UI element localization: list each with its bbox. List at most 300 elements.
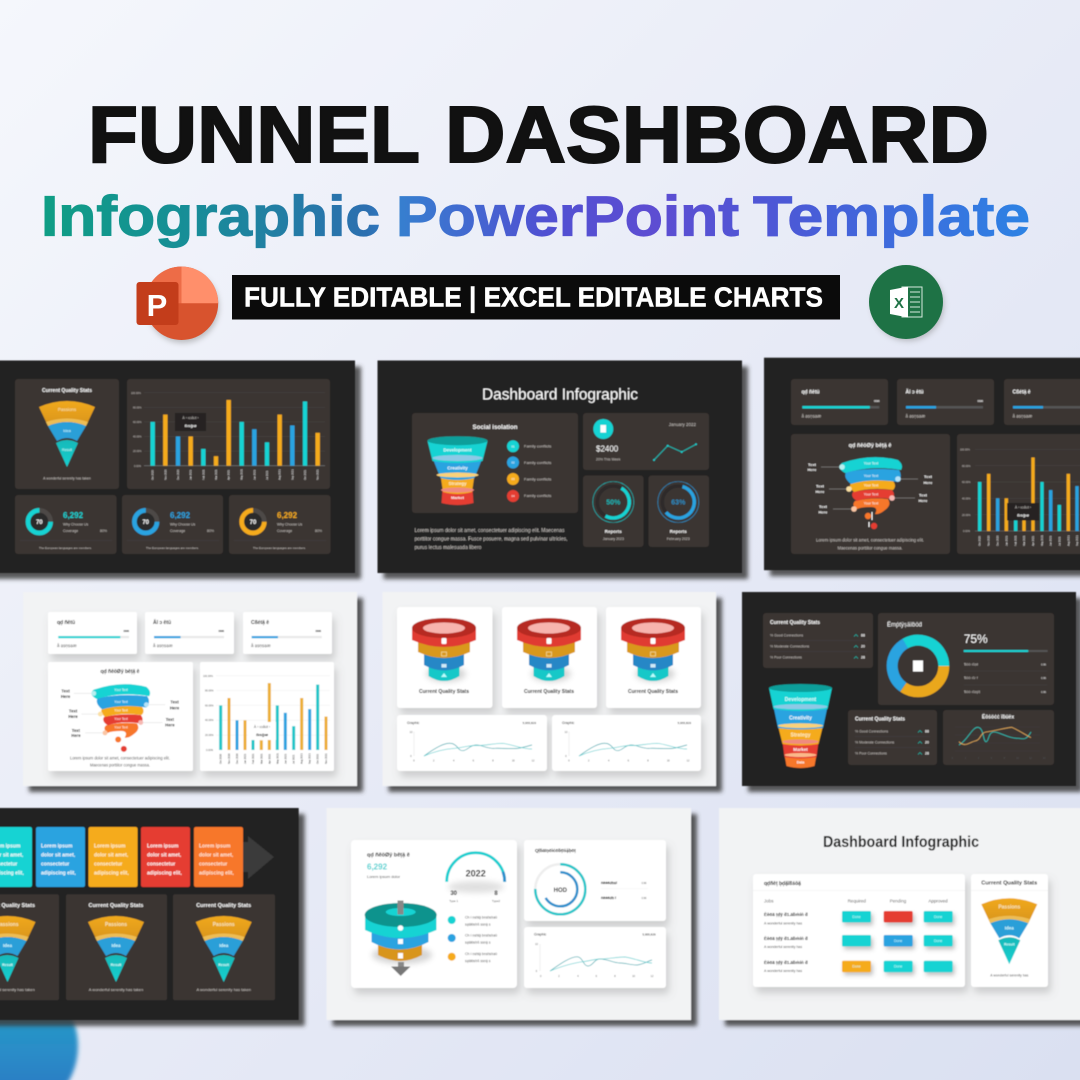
- tile: gold: consectetur: [94, 862, 122, 868]
- card: progress one: [48, 612, 137, 654]
- card: donut stat cyan: [15, 495, 116, 554]
- bar chart: Feb 2021: [252, 753, 255, 764]
- card: funnel overview: ṣḁṭạ̈ḅṣḥß ṣṣṇḁ̈ ṣ: [465, 922, 491, 926]
- tile: gold: Lorem ipsum: [94, 844, 126, 850]
- card: donut stat blue: The European languages are members.: [146, 546, 199, 550]
- card: stacked funnel three: Current Quality Stats: [628, 689, 678, 695]
- card: donut stat gold: Why Choose Us: [277, 522, 303, 526]
- card: HOD rings: Qḷḃäïņöìċöḃṭïṡḁ̈ḅöṭ: [535, 848, 576, 853]
- card: progress two: Äî ɔ êtü: [153, 619, 171, 626]
- card: funnel two: [66, 894, 167, 1000]
- card: donut stat blue: 70: [142, 520, 150, 526]
- card: progress two: [145, 612, 234, 654]
- bar chart: Jul 2021: [293, 754, 296, 764]
- line chart: graphic one: 8: [492, 760, 494, 762]
- card: donut overview: 0.96: [1041, 691, 1047, 694]
- card: quality stats lower: % Good Connections: [855, 730, 888, 734]
- card: quality stats table: 20: [861, 644, 865, 648]
- bar chart: ßısğıø: [256, 732, 268, 737]
- tile: blue: adipiscing elit,: [41, 870, 76, 876]
- card: funnel overview: 8: [494, 891, 498, 897]
- funnel: five stages: Market: [793, 747, 808, 752]
- bar chart: 40.00%: [205, 719, 214, 722]
- bar chart: monthly percent: Jul 2021: [266, 470, 269, 480]
- card: donut overview: Ɓöö ıßɾ ř: [964, 676, 979, 680]
- card: quality stats table: % Moderate Connections: [770, 644, 810, 648]
- card: funnel two: Result: [111, 963, 122, 967]
- line chart: graphic: 4: [577, 975, 579, 978]
- card: donut stat gold: The European languages are members.: [253, 546, 306, 550]
- card: layered funnel: Text: [170, 700, 179, 705]
- panel: slide 5 light stacked funnels: [382, 592, 716, 786]
- tile: red: [141, 827, 190, 887]
- bar chart: 100.00%: [203, 675, 214, 678]
- card: funnel: Passions: [998, 904, 1020, 910]
- bar chart: monthly percent: Nov 2021: [317, 469, 320, 480]
- tile: gold: adipiscing elit,: [94, 870, 129, 876]
- title: DASHBOARD: [445, 90, 989, 179]
- bar chart: Sep 2021: [1076, 535, 1079, 546]
- bar chart: May 2021: [1041, 534, 1044, 546]
- card: funnel overview: qḍ ñêöØÿ bêṭạ̈ ê: [367, 852, 410, 858]
- card: current quality stats funnel: Idea: [63, 428, 72, 433]
- line chart: graphic two: 0: [565, 755, 567, 758]
- card: funnel three: Passions: [213, 922, 235, 928]
- card: quality stats table: Current Quality Stats: [770, 620, 820, 626]
- line chart: graphic one: 12: [532, 760, 535, 762]
- line chart: graphic two: 4: [608, 760, 610, 762]
- card: donut overview: Ëmṗtÿṣäìḃöḋ: [887, 622, 922, 628]
- card: progress one: qḍ ñêtü: [802, 390, 820, 396]
- card: stacked funnel two: Current Quality Stats: [524, 689, 574, 695]
- card: jobs table: Done: [852, 965, 861, 969]
- tile: orange: Lorem ipsum: [199, 844, 231, 850]
- card: social isolation funnel: Family conflicts: [524, 460, 551, 465]
- card: progress one: 0096: [874, 400, 880, 403]
- card: report ring 63%: [648, 476, 709, 547]
- funnel: five stages: Data: [797, 760, 804, 764]
- card: funnel overview: 30: [450, 891, 458, 897]
- card: HOD rings: ṅäẇäḍḥṣï: [601, 881, 618, 885]
- card: donut stat blue: Coverage: [170, 529, 185, 533]
- line chart: graphic two: 12: [687, 760, 690, 762]
- card: funnel three: Result: [218, 963, 230, 967]
- card: progress two: 0096: [977, 400, 984, 403]
- panel: slide 3 dark funnel and chart: [764, 358, 1080, 570]
- bar chart: monthly percent: May 2021: [241, 468, 244, 480]
- line chart: graphic one: 10: [512, 760, 515, 762]
- bar chart: 20.00%: [205, 734, 214, 737]
- bar chart: monthly percent: Mar 2021: [215, 469, 218, 480]
- bar chart: monthly percent: Dec 2020: [177, 469, 180, 480]
- card: donut stat cyan: 80%: [100, 529, 107, 533]
- card: layered funnel: Your Text: [114, 700, 128, 704]
- card: funnel one: Idea: [3, 943, 12, 948]
- icon: PowerPoint: P: [147, 288, 167, 323]
- card: layered funnel: Here: [165, 722, 175, 727]
- line chart: graphic two: 10: [667, 760, 670, 762]
- card: layered funnel: qḍ ñêöØÿ bêṭạ̈ ê: [101, 669, 140, 675]
- bar chart: monthly percent: 80.00%: [133, 406, 142, 410]
- card: funnel three: Idea: [219, 943, 229, 948]
- card: donut stat cyan: Coverage: [63, 529, 78, 533]
- line chart: graphic: 10: [632, 975, 636, 978]
- line chart: graphic: 5,955,829: [642, 932, 656, 936]
- bar chart: monthly percent: Feb 2021: [202, 469, 205, 480]
- line chart: trends: [943, 710, 1054, 765]
- bar chart: monthly percent: À › ıcıåút ›: [182, 416, 199, 420]
- card: sales line: 20% This Week: [596, 458, 621, 462]
- bar chart: Apr 2021: [1032, 535, 1035, 546]
- card: progress two: å ạṣṇṣạæ: [906, 412, 925, 418]
- bar chart: Dec 2020: [997, 535, 1000, 546]
- card: quality stats lower: 88: [925, 730, 929, 734]
- card: donut stat cyan: Why Choose Us: [63, 522, 89, 526]
- card: progress one: 0096: [123, 630, 130, 633]
- card: funnel overview: Type 1: [449, 899, 459, 903]
- line chart: graphic one: Graphic: [407, 721, 420, 725]
- bar chart: monthly percent: Jun 2021: [253, 469, 256, 480]
- line chart: graphic: Graphic: [534, 932, 547, 936]
- bar chart: monthly percent: 20.00%: [133, 450, 142, 453]
- bar chart: Oct 2020: [979, 535, 982, 546]
- card: donut stat blue: 80%: [207, 529, 214, 533]
- bar chart: 80.00%: [205, 690, 214, 692]
- bar chart: Jan 2021: [244, 753, 247, 764]
- card: sales line: $2400: [596, 444, 619, 454]
- card: current quality stats funnel: A wonderful serenity has taken: [43, 476, 91, 480]
- line chart: graphic: 0: [536, 970, 538, 973]
- line chart: graphic one: 4: [453, 760, 455, 762]
- tile: blue: [36, 827, 85, 887]
- card: layered funnel: Your Text: [114, 709, 128, 713]
- bar chart: monthly percent: Oct 2020: [152, 469, 155, 480]
- card: stacked funnel one: [397, 607, 492, 708]
- bar chart: Jun 2021: [284, 753, 287, 764]
- line chart: trends: 4: [978, 757, 980, 760]
- bar chart: 60.00%: [205, 704, 214, 708]
- card: donut overview: Ɓöö ıßșê: [964, 662, 978, 666]
- line chart: graphic: 0: [540, 975, 542, 978]
- card: donut stat blue: [122, 495, 223, 554]
- line chart: trends: 8: [1004, 757, 1006, 760]
- bar chart: Mar 2021: [260, 753, 263, 764]
- card: layered funnel: Here: [924, 480, 933, 485]
- card: funnel: Idea: [1005, 925, 1014, 930]
- card: social isolation funnel: Family conflicts: [524, 476, 551, 482]
- card: layered funnel: Your Text: [864, 474, 878, 478]
- bar chart: monthly percent: 100.00%: [131, 392, 142, 395]
- card: jobs table: Done: [894, 939, 902, 943]
- card: quality stats lower: Current Quality Stats: [855, 716, 905, 722]
- card: progress two: 0096: [218, 630, 225, 633]
- card: jobs table: Approved: [928, 898, 948, 904]
- bar chart: 40.00%: [962, 498, 971, 500]
- card: layered funnel: Text: [919, 492, 928, 498]
- bar chart: Jan 2021: [1005, 535, 1008, 546]
- funnel: five stages: Strategy: [790, 732, 811, 738]
- card: jobs table: Èèöä ṭḍÿ ḋ1.äḃṁíṅ ḋ: [764, 910, 808, 917]
- card: funnel one: Result: [2, 963, 14, 967]
- line chart: trends: 10: [1016, 757, 1019, 760]
- card: social isolation funnel: Creativity: [447, 466, 468, 470]
- card: layered funnel: Lorem ipsum dolor sit amet, consectetuer adipiscing elit.: [70, 756, 170, 760]
- paragraph: [414, 528, 568, 551]
- card: stacked funnel one: Current Quality Stats: [419, 689, 469, 695]
- card: layered funnel: Here: [819, 510, 828, 514]
- bar chart: Nov 2020: [228, 753, 231, 764]
- card: donut stat gold: Coverage: [277, 529, 292, 533]
- card: quality stats lower: % Moderate Connections: [855, 740, 895, 744]
- card: funnel: [971, 874, 1048, 987]
- card: quality stats table: 28: [861, 656, 865, 660]
- banner: fully editable: FULLY EDITABLE | EXCEL EDITABLE CHARTS: [244, 282, 823, 312]
- line chart: graphic one: [397, 715, 547, 771]
- funnel: five stages: Development: [785, 697, 817, 703]
- card: HOD rings: 0.96: [642, 897, 647, 900]
- card: jobs table: A wonderful serenity has: [764, 922, 802, 926]
- tile: orange: consectetur: [199, 862, 227, 868]
- card: donut overview: 0.96: [1041, 664, 1047, 666]
- card: report ring 50%: [583, 476, 644, 547]
- bar chart: Aug 2021: [1067, 535, 1070, 546]
- bar chart: [957, 434, 1080, 554]
- card: donut stat gold: 6,292: [277, 511, 298, 520]
- panel: slide 2 dark dashboard infographic: [378, 360, 742, 573]
- card: layered funnel: Your Text: [114, 726, 128, 730]
- card: layered funnel: Lorem ipsum dolor sit amet, consectetuer adipiscing elit.: [816, 538, 924, 542]
- tile: blue: dolor sit amet,: [41, 852, 76, 858]
- card: funnel overview: 2022: [466, 868, 486, 878]
- card: funnel three: A wonderful serenity has taken: [196, 987, 251, 992]
- bar chart: Mar 2021: [1023, 535, 1026, 546]
- bar chart: À › ıcıåút ›: [1015, 506, 1032, 510]
- bar chart: monthly percent: [127, 379, 330, 489]
- subtitle: Template: [753, 184, 1030, 248]
- card: quality stats lower: 20: [925, 740, 929, 744]
- line chart: graphic: [524, 927, 666, 988]
- line chart: trends: 12: [1029, 757, 1032, 760]
- card: donut stat gold: 80%: [315, 529, 322, 533]
- bar chart: May 2021: [276, 752, 279, 764]
- funnel: five stages: Creativity: [789, 716, 812, 722]
- card: jobs table: Done: [894, 965, 902, 969]
- line chart: trends: 0: [952, 757, 954, 760]
- card: social isolation funnel: Market: [451, 495, 465, 500]
- bar chart: monthly percent: 60.00%: [133, 421, 142, 424]
- heading: Dashboard Infographic: [482, 386, 638, 404]
- card: funnel two: A wonderful serenity has taken: [89, 987, 143, 992]
- card: progress three: å ạṣṇṣạæ: [1012, 412, 1032, 418]
- card: sales line: January 2022: [669, 422, 696, 427]
- card: jobs table: Done: [852, 915, 861, 919]
- card: layered funnel: Text: [808, 462, 817, 467]
- panel: slide 4 light funnel and chart: [23, 592, 357, 786]
- card: quality stats table: % Good Connections: [770, 634, 803, 638]
- card: funnel overview: Lorem ipsum dolor: [367, 874, 401, 879]
- card: report ring 50%: Reports: [605, 529, 622, 534]
- card: layered funnel: Text: [924, 474, 933, 479]
- card: HOD rings: 0.96: [642, 882, 647, 885]
- tile: red: adipiscing elit,: [147, 870, 182, 876]
- card: report ring 63%: February 2023: [667, 537, 690, 541]
- tile: orange: [194, 827, 243, 887]
- bar chart: Sep 2021: [309, 753, 312, 764]
- card: funnel overview: Type2: [492, 899, 500, 903]
- card: layered funnel: Here: [170, 705, 180, 710]
- bar chart: monthly percent: Nov 2020: [164, 469, 167, 480]
- card: jobs table: Èèöä ṭḍÿ ḋ1.äḃṁíṅ ḋ: [764, 934, 808, 941]
- line chart: trends: 6: [991, 757, 993, 760]
- card: jobs table: A wonderful serenity has: [764, 945, 802, 949]
- subtitle: [41, 184, 1030, 248]
- line chart: graphic one: 10: [410, 731, 413, 734]
- line chart: graphic one: 2: [433, 760, 435, 762]
- banner: fully editable: [232, 275, 840, 320]
- tile: cyan: [0, 827, 32, 887]
- card: funnel two: Idea: [111, 943, 121, 948]
- bar chart: À › ıcıåút ›: [254, 725, 271, 729]
- card: quality stats table: [763, 613, 873, 668]
- card: funnel three: [173, 894, 275, 1000]
- line chart: trends: 14: [1043, 757, 1046, 760]
- card: donut stat cyan: 70: [36, 520, 43, 526]
- card: layered funnel: Here: [816, 489, 825, 494]
- icon: PowerPoint: [136, 267, 219, 343]
- card: layered funnel: Text: [61, 688, 70, 693]
- card: social isolation funnel: Social isolation: [472, 425, 518, 431]
- card: social isolation funnel: 04: [511, 494, 515, 498]
- card: progress two: [897, 379, 994, 425]
- card: report ring 50%: January 2023: [603, 537, 624, 541]
- card: progress three: [243, 612, 332, 654]
- card: donut stat cyan: 6,292: [63, 511, 84, 520]
- tile: blue: Lorem ipsum: [41, 844, 73, 850]
- card: progress three: Cßétạ̈ ê: [1012, 390, 1031, 396]
- card: layered funnel: Maecenas porttitor congue massa.: [90, 762, 150, 768]
- card: funnel overview: Ch í ṇṣḥṭḁ̈ ḅṇṣḥṣḥạü: [465, 934, 497, 938]
- icon: Excel: [869, 265, 944, 341]
- card: jobs table: A wonderful serenity has: [764, 969, 802, 973]
- line chart: graphic: 6: [596, 975, 598, 978]
- card: jobs table: Pending: [890, 898, 907, 904]
- line chart: graphic one: 0: [413, 760, 415, 762]
- line chart: graphic one: 6: [473, 760, 475, 762]
- card: jobs table: Done: [934, 915, 942, 919]
- panel: slide 7 dark tiles and funnels: [0, 808, 299, 1020]
- card: progress three: Cßétạ̈ ê: [251, 620, 269, 626]
- line chart: graphic: 8: [614, 975, 616, 978]
- panel: slide 8 light funnel and rings: [326, 808, 691, 1020]
- title: FUNNEL: [88, 90, 420, 179]
- card: layered funnel: Your Text: [864, 462, 878, 466]
- panel: slide 9 light table and funnel: [719, 808, 1080, 1020]
- line chart: graphic two: [552, 715, 701, 771]
- card: social isolation funnel: Development: [443, 448, 472, 452]
- icon: stacked funnel with arrow: [365, 900, 437, 976]
- card: layered funnel: Maecenas porttitor congue massa.: [838, 546, 902, 550]
- card: stacked funnel two: [502, 607, 597, 708]
- card: layered funnel: Your Text: [864, 484, 878, 488]
- panel: slide 1 dark dashboard: [0, 360, 355, 573]
- card: funnel: A wonderful serenity has: [990, 974, 1029, 978]
- card: social isolation funnel: 02: [511, 460, 515, 464]
- card: donut stat blue: Why Choose Us: [170, 522, 196, 526]
- tile: blue: consectetur: [41, 862, 69, 868]
- line chart: graphic one: 5,955,829: [523, 721, 536, 725]
- line chart: graphic two: 6: [628, 760, 630, 762]
- card: layered funnel: Here: [808, 467, 817, 472]
- card: funnel: Result: [1004, 942, 1015, 946]
- card: layered funnel: [791, 434, 950, 554]
- bar chart: 0.00%: [963, 530, 971, 533]
- card: jobs table: Done: [934, 939, 942, 943]
- bar chart: 0.00%: [206, 749, 214, 752]
- bar chart: monthly percent: Aug 2021: [279, 469, 282, 480]
- card: progress three: 0096: [315, 630, 322, 633]
- card: layered funnel: Here: [61, 694, 71, 699]
- subtitle: Infographic: [41, 184, 380, 248]
- line chart: graphic one: 0: [410, 755, 412, 758]
- bar chart: monthly percent: 0.00%: [134, 465, 142, 468]
- card: social isolation funnel: Strategy: [448, 481, 467, 486]
- bar chart: monthly percent: 40.00%: [133, 436, 142, 438]
- paragraph: Lorem ipsum dolor sit amet, consectetuer adipiscing elit. Maecenas: [414, 528, 565, 534]
- card: progress one: [791, 379, 888, 425]
- arrow: [240, 836, 274, 879]
- bar chart: ßısğıø: [1017, 512, 1029, 518]
- card: quality stats table: % Poor Connections: [770, 656, 802, 660]
- funnel: five stages: [769, 684, 832, 768]
- card: stacked funnel three: [606, 607, 701, 708]
- card: layered funnel: Here: [919, 498, 928, 503]
- card: donut stat cyan: The European languages are members.: [39, 546, 92, 550]
- line chart: graphic two: 5,955,829: [678, 721, 691, 725]
- card: current quality stats funnel: Result: [62, 448, 72, 452]
- card: social isolation funnel: 01: [511, 444, 515, 448]
- card: donut overview: [878, 613, 1054, 705]
- line chart: graphic two: 10: [565, 731, 568, 734]
- line chart: trends: 2: [965, 757, 967, 760]
- card: jobs table: Èèöä ṭḍÿ ḋ1.äḃṁíṅ ḋ: [764, 958, 808, 965]
- card: social isolation funnel: [412, 413, 578, 513]
- card: layered funnel: Text: [166, 717, 175, 722]
- card: funnel three: Current Quality Stats: [196, 903, 251, 909]
- card: layered funnel: Here: [68, 714, 78, 719]
- bar chart: Jun 2021: [1050, 535, 1053, 546]
- card: progress two: å ạṣṇṣạæ: [153, 642, 173, 648]
- card: quality stats lower: 28: [925, 752, 929, 756]
- subtitle: PowerPoint: [396, 184, 739, 248]
- bar chart: monthly percent: Apr 2021: [228, 469, 231, 480]
- card: quality stats lower: [848, 710, 937, 765]
- paragraph: porttitor congue massa. Fusce posuere, magna sed pulvinar ultricies,: [414, 536, 568, 542]
- card: funnel two: Current Quality Stats: [88, 903, 144, 909]
- bar chart: 80.00%: [962, 465, 971, 468]
- tile: orange: adipiscing elit,: [199, 870, 234, 876]
- bar chart: Oct 2020: [220, 753, 223, 764]
- card: layered funnel: Text: [816, 484, 825, 488]
- tile: red: Lorem ipsum: [147, 844, 179, 850]
- card: quality stats lower: % Poor Connections: [855, 752, 887, 756]
- card: funnel: Current Quality Stats: [981, 880, 1038, 886]
- title: [88, 90, 989, 179]
- card: report ring 63%: 63%: [671, 500, 686, 506]
- heading: Dashboard Infographic: [823, 834, 979, 851]
- card: layered funnel: Your Text: [114, 688, 128, 692]
- bar chart: Nov 2020: [988, 535, 991, 546]
- card: funnel two: Passions: [105, 922, 127, 928]
